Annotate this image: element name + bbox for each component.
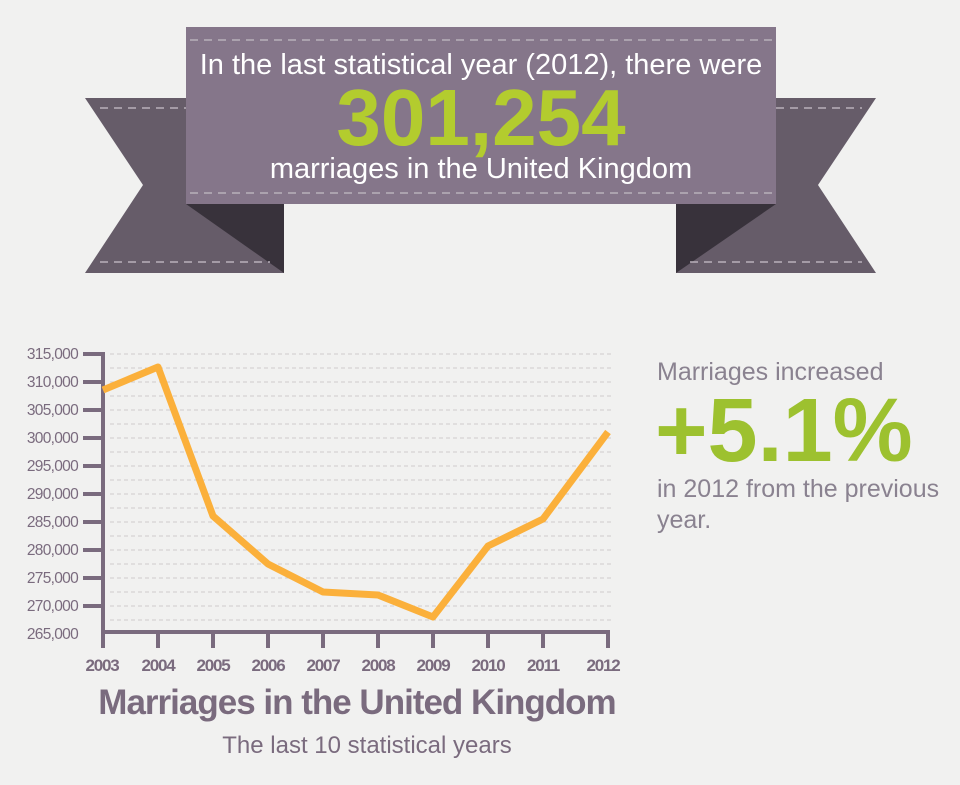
y labels: 275,000 [27, 570, 79, 587]
chart subtitle: The last 10 statistical years [222, 732, 512, 759]
y labels [27, 346, 79, 643]
callout: increase [655, 358, 939, 534]
banner left tail [85, 98, 284, 273]
line chart [27, 346, 620, 675]
banner text: In the last statistical year (2012), there were [200, 49, 762, 81]
x labels: 2004 [141, 656, 176, 675]
x labels: 2003 [85, 656, 119, 675]
banner right tail [676, 98, 876, 273]
banner text: marriages in the United Kingdom [270, 153, 692, 185]
x labels: 2008 [361, 656, 395, 675]
x labels: 2009 [416, 656, 450, 675]
callout: increase: Marriages increased [657, 358, 884, 386]
y labels: 270,000 [27, 598, 79, 615]
callout: increase: +5.1% [655, 381, 913, 481]
y labels: 265,000 [27, 626, 79, 643]
y labels: 285,000 [27, 514, 79, 531]
y labels: 290,000 [27, 486, 79, 503]
x labels: 2011 [527, 656, 560, 675]
x labels [85, 656, 620, 675]
banner [85, 27, 876, 273]
chart title: Marriages in the United Kingdom [98, 683, 616, 722]
y labels: 280,000 [27, 542, 79, 559]
x labels: 2010 [471, 656, 505, 675]
y labels: 300,000 [27, 430, 79, 447]
callout: increase: in 2012 from the previous [657, 475, 939, 503]
x labels: 2006 [251, 656, 285, 675]
x labels: 2005 [196, 656, 230, 675]
axes [83, 352, 610, 648]
banner main [186, 27, 776, 204]
banner text: 301,254 [336, 73, 626, 162]
banner text [200, 49, 762, 185]
x labels: 2007 [306, 656, 340, 675]
y labels: 310,000 [27, 374, 79, 391]
y labels: 315,000 [27, 346, 79, 363]
data line [103, 367, 608, 617]
y labels: 295,000 [27, 458, 79, 475]
x labels: 2012 [586, 656, 620, 675]
callout: increase: year. [657, 506, 711, 534]
y labels: 305,000 [27, 402, 79, 419]
